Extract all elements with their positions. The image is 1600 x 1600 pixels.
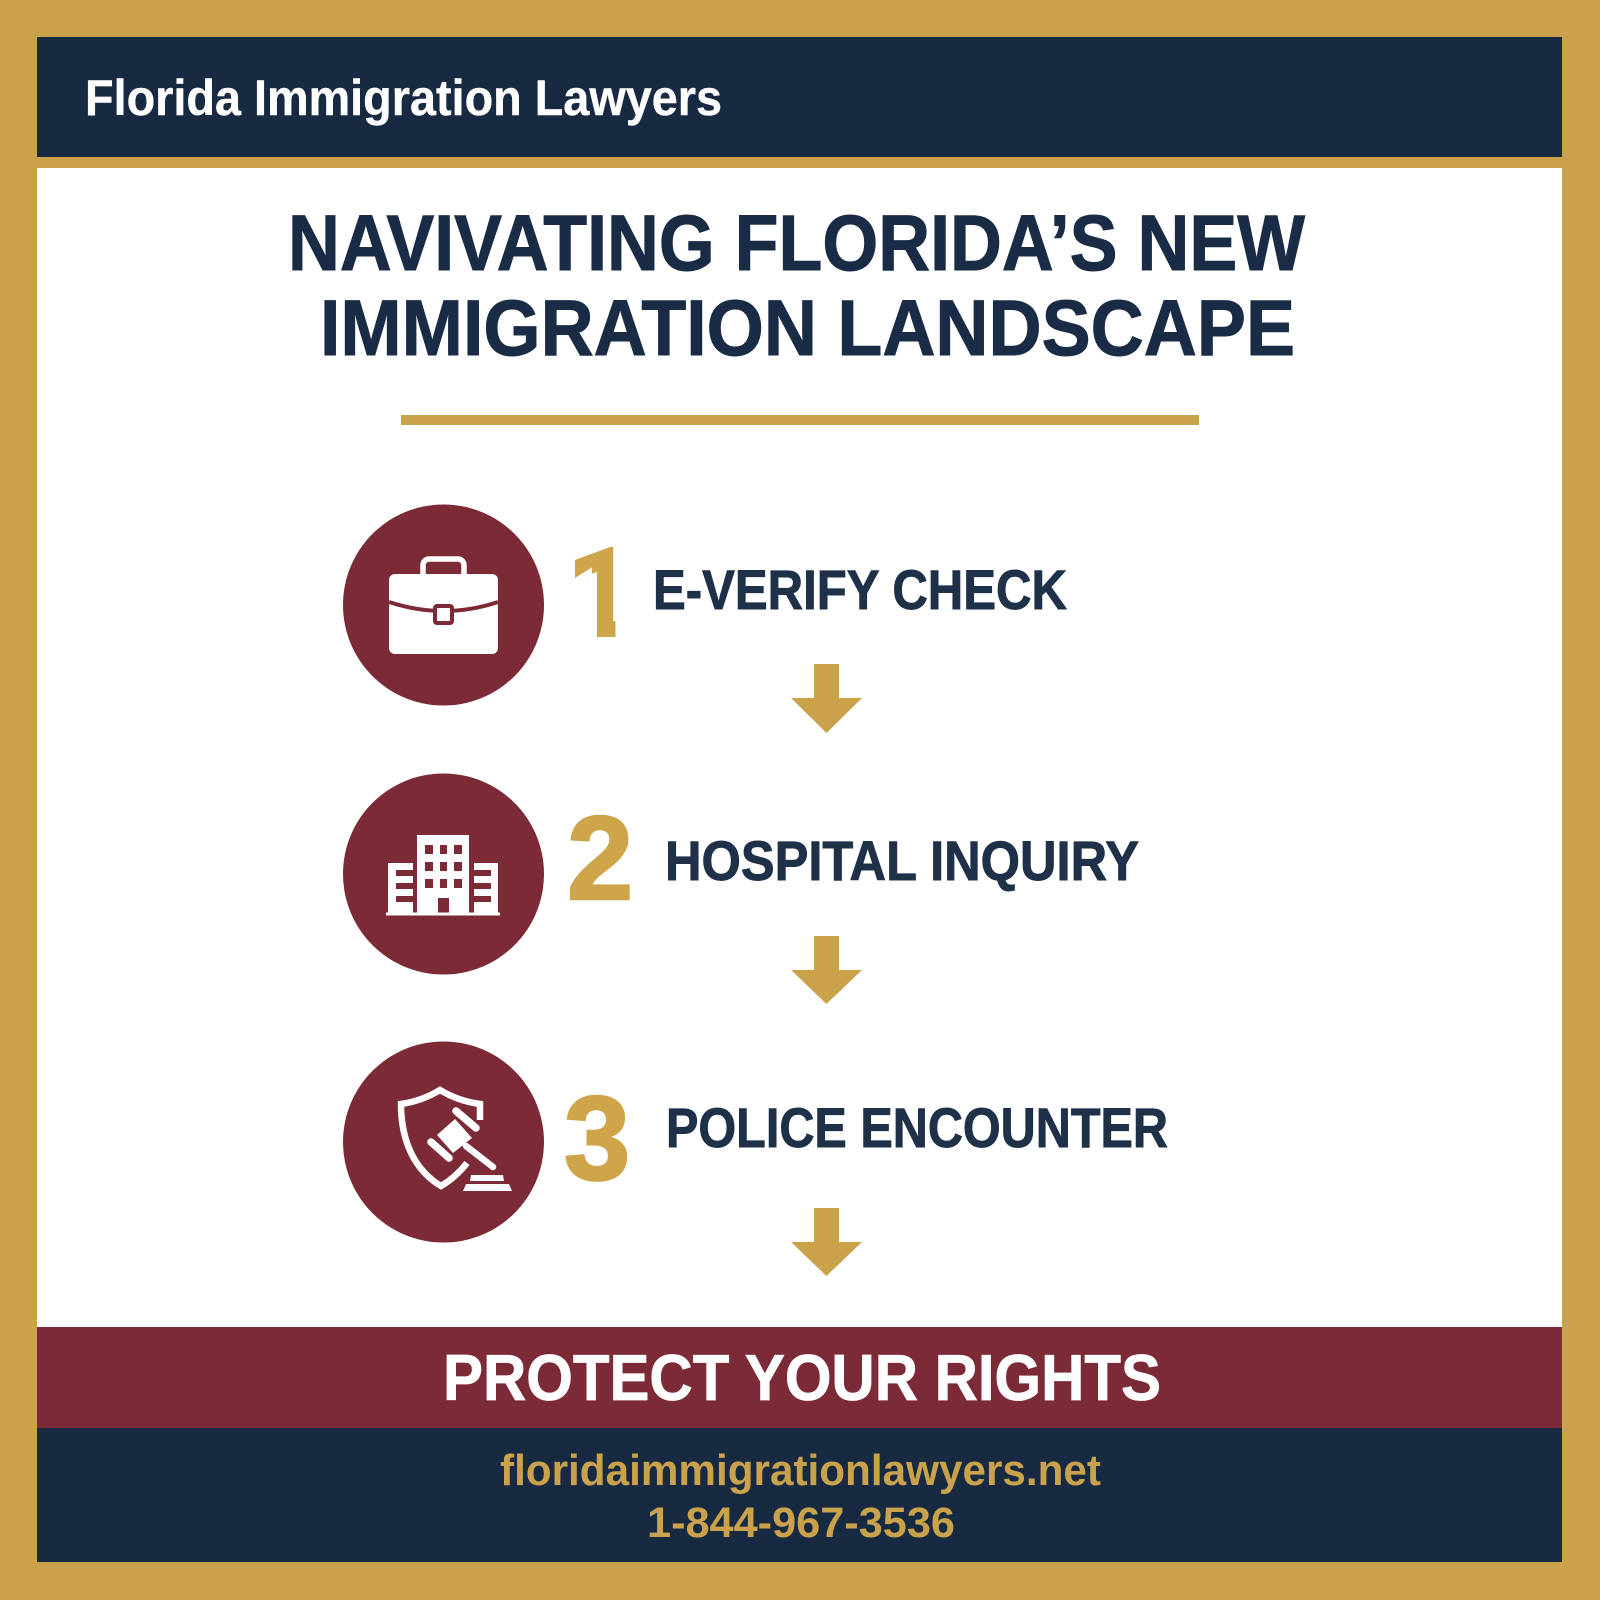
brand name: Florida Immigration Lawyers (85, 70, 722, 126)
arrow 2 (791, 936, 862, 1004)
banner text: PROTECT YOUR RIGHTS (443, 1341, 1161, 1414)
icon: briefcase (343, 504, 544, 706)
number 2: 2 (567, 792, 633, 925)
number 3: 3 (564, 1072, 630, 1205)
number 1: 1 (564, 522, 635, 663)
header bar (37, 37, 1562, 157)
step 1: e-verify check (343, 504, 1067, 706)
arrow 1 (791, 664, 862, 733)
title: NAVIVATING FLORIDA’S NEW (288, 198, 1305, 287)
step 2: hospital inquiry (343, 774, 1139, 974)
label: POLICE ENCOUNTER (666, 1096, 1168, 1159)
step 3: police encounter (343, 1042, 1168, 1242)
arrow 3 (791, 1208, 862, 1276)
website: floridaimmigrationlawyers.net (500, 1446, 1101, 1495)
call-to-action banner (37, 1327, 1562, 1428)
icon: shield and gavel (343, 1042, 544, 1242)
footer bar (37, 1428, 1562, 1562)
title: IMMIGRATION LANDSCAPE (320, 283, 1295, 372)
title divider (401, 415, 1199, 425)
title (288, 198, 1305, 372)
main white panel (37, 168, 1562, 1328)
phone number: 1-844-967-3536 (647, 1499, 955, 1547)
icon: hospital building (343, 774, 544, 974)
label: E-VERIFY CHECK (653, 558, 1067, 621)
label: HOSPITAL INQUIRY (665, 829, 1139, 892)
